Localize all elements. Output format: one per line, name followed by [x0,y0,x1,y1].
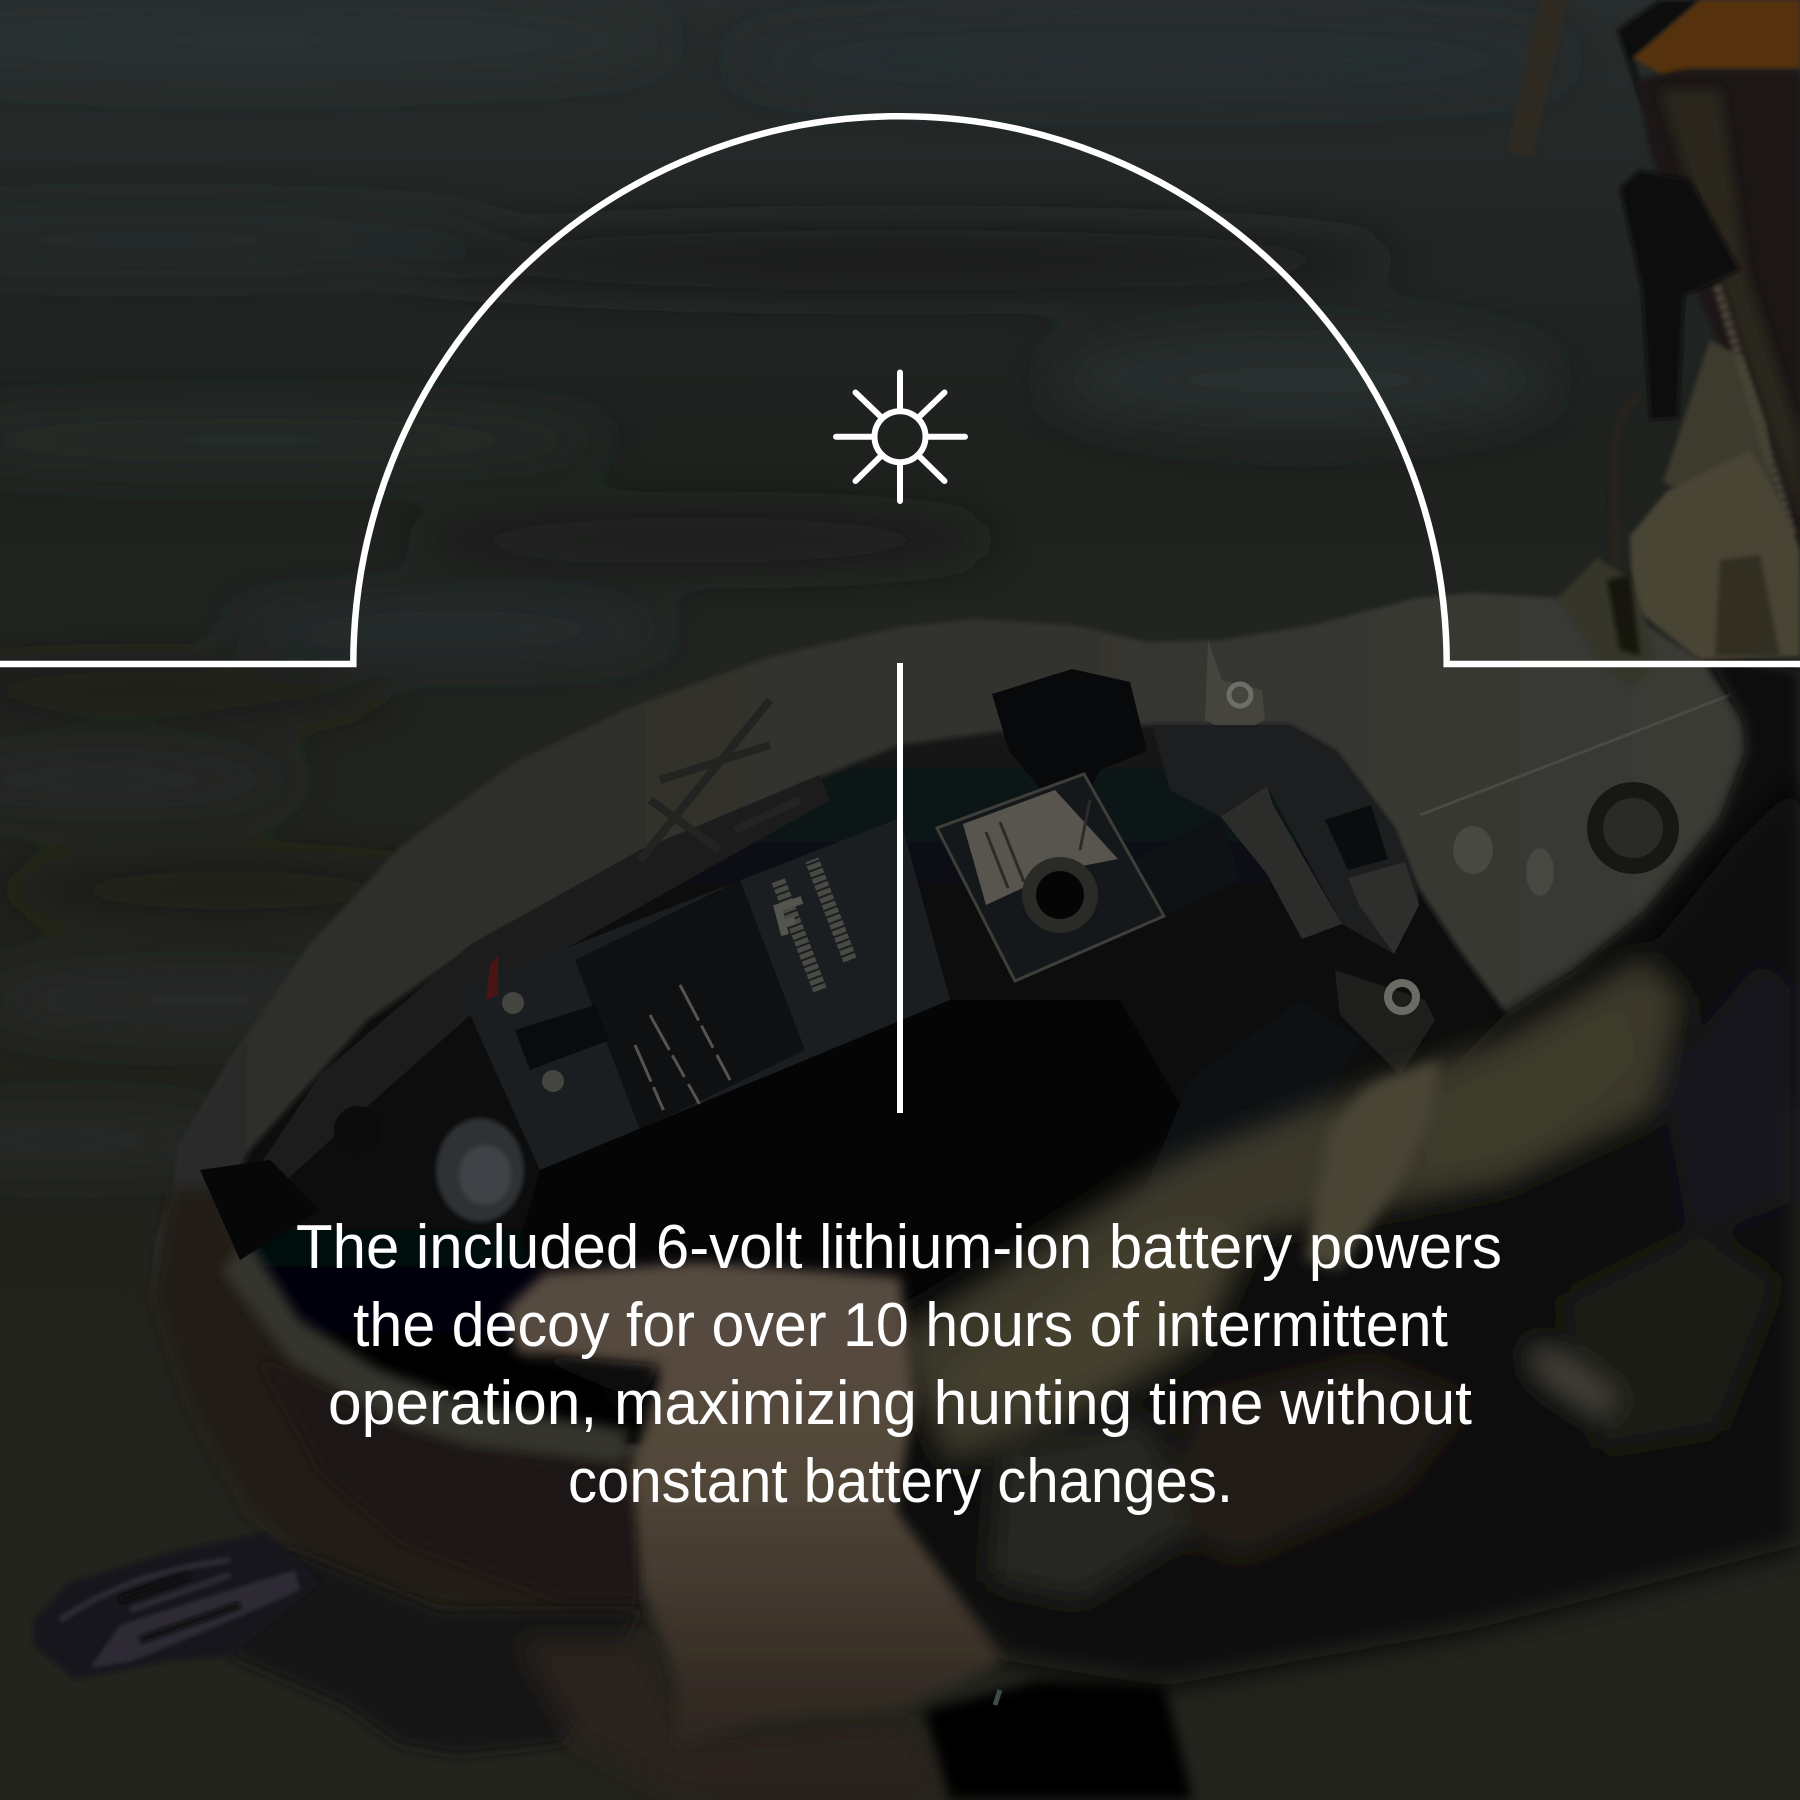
decoy: lower hull shaded band [260,1360,640,1600]
decoy: lower plates [520,970,1435,1420]
hunter: hanging strap tip [1507,0,1567,156]
icon: sun [836,372,965,501]
vertical connector line [897,663,903,1113]
decoy: battery label plate [459,818,950,1170]
description text: constant battery changes. [568,1447,1233,1516]
decoy: embossed logo [640,700,800,860]
decoy: woven lower hull [152,1190,650,1625]
description text: The included 6-volt lithium-ion battery powers [296,1213,1502,1282]
hunter: fabric at upper right [1557,0,1800,688]
decoy: right side plate [1152,725,1419,954]
hunter: hand [505,1262,1003,1800]
semicircle outline with side rules [0,116,1800,664]
decoy: bill [34,1533,321,1679]
description text [296,1213,1502,1516]
decoy: inner cavity [230,725,1508,1445]
hunter: shadow beside foam [1300,650,1800,1320]
decoy: foam badge and droplets [1420,695,1730,896]
decoy: plug and knob [200,640,1265,1260]
decoy: head below bill [230,1548,640,1755]
hunter: camo sleeve [880,780,1800,1686]
description text: operation, maximizing hunting time without [328,1369,1472,1438]
decoy: grey rim strip under cavity [222,1240,630,1462]
description text: the decoy for over 10 hours of intermittent [353,1291,1448,1360]
decoy: red battery tab [486,955,498,1000]
decoy: foam body [152,593,1747,1600]
decoy: motor plate [937,774,1240,981]
decoy: left perforated rim [250,775,830,1195]
hunter: black watch strap [925,1680,1193,1800]
hunter: cuff [1305,1060,1440,1270]
